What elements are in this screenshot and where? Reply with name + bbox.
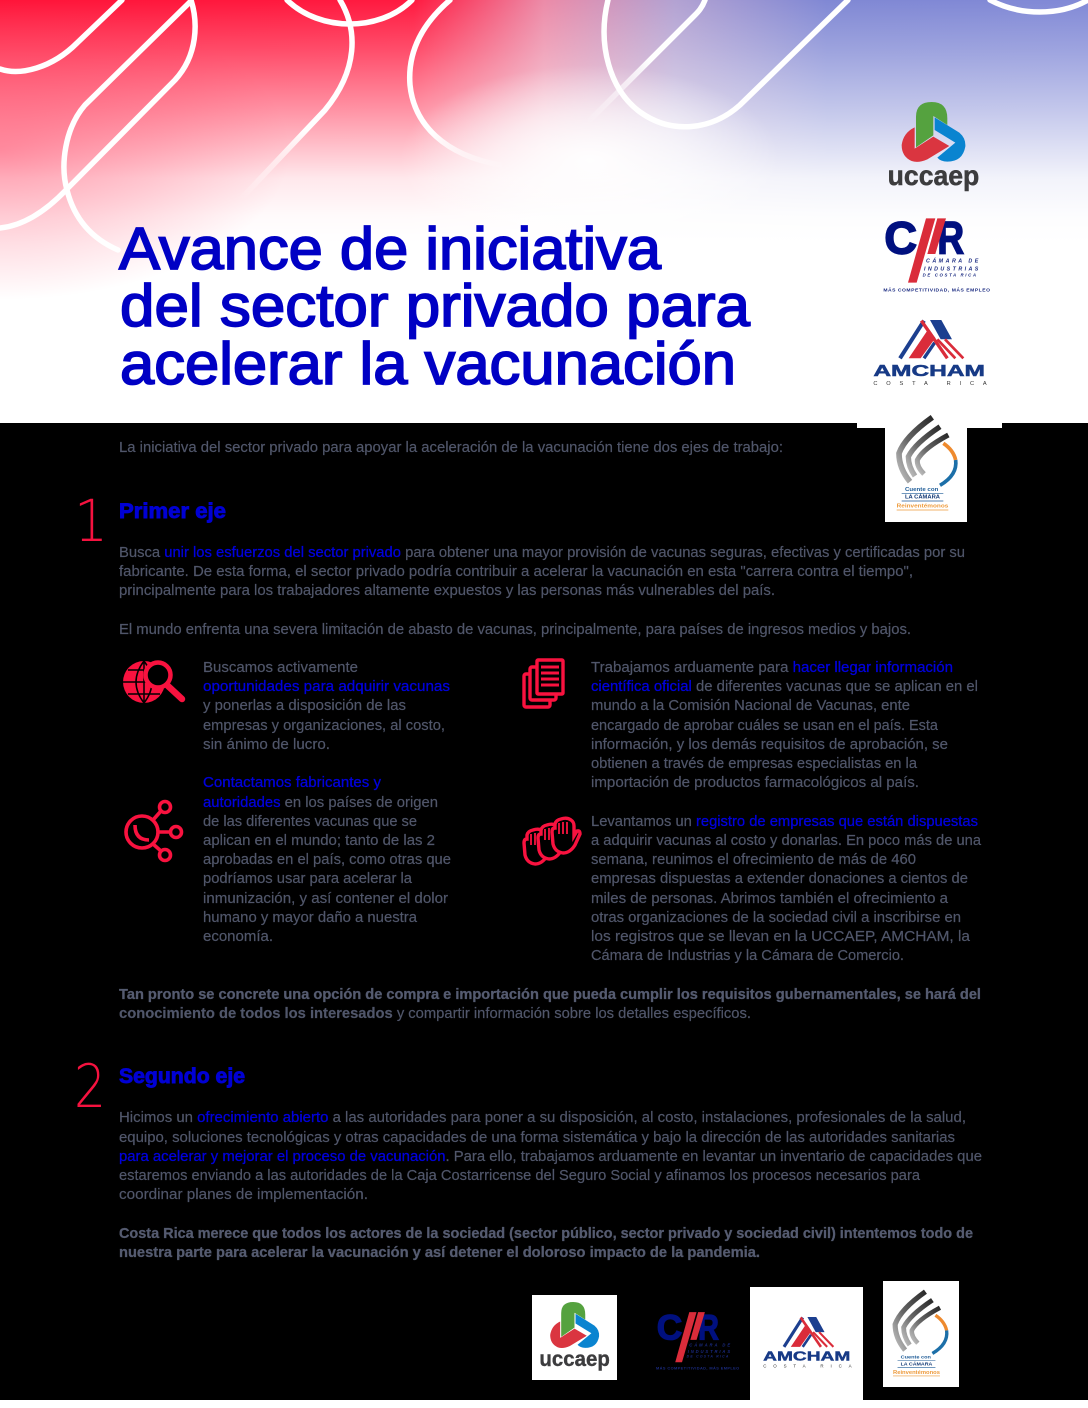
text block: información científica: obtienen a través de empresas especialistas en la bbox=[591, 756, 918, 772]
text block: registro de empresas: Cámara de Industrias y la Cámara de Comercio. bbox=[591, 948, 904, 964]
logo: uccaep top bbox=[888, 102, 979, 191]
text block: registro de empresas: semana, reunimos el ofrecimiento de más de 460 bbox=[591, 852, 916, 868]
footer logo: AMCHAM: COSTA RICA bbox=[763, 1364, 852, 1369]
text block: información científica: importación de productos farmacológicos al país. bbox=[591, 775, 919, 791]
number 2: 2 bbox=[74, 1052, 106, 1122]
text block: registro de empresas: Levantamos un registro de empresas que están dispuestas bbox=[591, 814, 978, 830]
closing statement: nuestra parte para acelerar la vacunación y así detener el doloroso impacto de la pandemia. bbox=[119, 1245, 760, 1261]
logo: Cámara de Industrias top: R bbox=[937, 212, 964, 263]
paragraph: first axis description: fabricante. De esta forma, el sector privado podría contribuir a acelerar la vacunación en esta "carrera contra el tiempo", bbox=[119, 564, 913, 580]
header gradient banner with capsule outlines bbox=[0, 0, 1088, 300]
intro text: La iniciativa del sector privado para apoyar la aceleración de la vacunación tiene dos ejes de trabajo: bbox=[119, 440, 783, 456]
footer logo: Cámara de Industrias: MÁS COMPETITIVIDAD, MÁS EMPLEO bbox=[656, 1365, 739, 1370]
title: del sector privado para bbox=[120, 273, 750, 339]
text block: contactamos fabricantes: Contactamos fabricantes y bbox=[203, 775, 382, 791]
text block: adquirir vacunas bbox=[203, 660, 450, 753]
text block: registro de empresas: otras organizaciones de la sociedad civil a inscribirse en bbox=[591, 910, 961, 926]
text block: información científica: mundo a la Comisión Nacional de Vacunas, ente bbox=[591, 698, 910, 714]
footer logo: Cámara de Industrias: C bbox=[657, 1308, 682, 1347]
title bbox=[119, 216, 750, 397]
paragraph: second axis description: Hicimos un ofrecimiento abierto a las autoridades para poner a su disposición, al costo, instalaciones, profesionales de la salud, bbox=[119, 1110, 966, 1126]
white notch behind top-right logo bbox=[857, 423, 1002, 522]
footer logo: Cámara de Industrias bbox=[656, 1308, 739, 1370]
text block: registro de empresas: los registros que se llevan en la UCCAEP, AMCHAM, la bbox=[591, 929, 971, 945]
heading: segundo eje: Segundo eje bbox=[119, 1065, 245, 1088]
footer logo: uccaep: uccaep bbox=[539, 1347, 610, 1371]
text block: información científica: Trabajamos arduamente para hacer llegar información bbox=[591, 660, 953, 676]
number 1: 1 bbox=[74, 487, 108, 555]
footer logo: AMCHAM: AMCHAM bbox=[763, 1350, 850, 1364]
text block: información científica: información, y los demás requisitos de aprobación, se bbox=[591, 737, 948, 753]
logo: La Cámara top: Reinventémonos bbox=[897, 504, 948, 510]
closing statement bbox=[119, 1226, 973, 1261]
text block: contactamos fabricantes: humano y mayor daño a nuestra bbox=[203, 910, 418, 926]
text block: contactamos fabricantes: aprobadas en el país, como otras que bbox=[203, 852, 451, 868]
text block: contactamos fabricantes bbox=[203, 775, 451, 945]
text block: registro de empresas: a adquirir vacunas al costo y donarlas. En poco más de una bbox=[591, 833, 982, 849]
text block: adquirir vacunas: empresas y organizaciones, al costo, bbox=[203, 718, 445, 734]
footer logo: uccaep bbox=[532, 1295, 617, 1380]
text block: adquirir vacunas: sin ánimo de lucro. bbox=[203, 737, 330, 753]
closing note of first axis: conocimiento de todos los interesados y compartir información sobre los detalles específicos. bbox=[119, 1006, 751, 1022]
footer logo: Cámara de Industrias: CÁMARA DE bbox=[689, 1343, 730, 1348]
footer logo: La Cámara: LA CÁMARA bbox=[901, 1361, 933, 1368]
text block: adquirir vacunas: Buscamos activamente bbox=[203, 660, 358, 676]
footer logo: Cámara de Industrias: R bbox=[698, 1308, 719, 1347]
text block: información científica: encargado de aprobar cuáles se usan en el país. Esta bbox=[591, 718, 939, 734]
text block: contactamos fabricantes: de las diferentes vacunas que se bbox=[203, 814, 417, 830]
text block: contactamos fabricantes: inmunización, y así contener el dolor bbox=[203, 891, 448, 907]
paragraph: second axis description: equipo, soluciones tecnológicas y otras capacidades de una forma sistemática y bajo la dirección de las autoridades sanitarias bbox=[119, 1130, 955, 1146]
icon: globe with magnifier bbox=[123, 661, 182, 703]
title: Avance de iniciativa bbox=[119, 216, 661, 282]
paragraph: first axis description: principalmente para los trabajadores altamente expuestos y las personas más vulnerables del país. bbox=[119, 583, 775, 599]
icon: stacked documents bbox=[524, 660, 563, 707]
logo: Cámara de Industrias top: CÁMARA DE bbox=[926, 258, 979, 265]
text block: registro de empresas: miles de personas. Abrimos también el ofrecimiento a bbox=[591, 891, 949, 907]
text block: registro de empresas bbox=[591, 814, 982, 964]
logo: Cámara de Industrias top: DE COSTA RICA bbox=[923, 273, 976, 278]
footer logo: Cámara de Industrias: INDUSTRIAS bbox=[688, 1349, 730, 1354]
icon: raised hands bbox=[524, 818, 580, 864]
closing statement: Costa Rica merece que todos los actores de la sociedad (sector público, sector privado y sociedad civil) intentemos todo de bbox=[119, 1226, 973, 1242]
text block: contactamos fabricantes: podríamos usar para acelerar la bbox=[203, 871, 413, 887]
paragraph: second axis description bbox=[119, 1110, 982, 1203]
text block: contactamos fabricantes: economía. bbox=[203, 929, 273, 945]
footer logo: La Cámara bbox=[883, 1281, 959, 1387]
text block: adquirir vacunas: y ponerlas a disposición de las bbox=[203, 698, 406, 714]
logo: Cámara de Industrias top: C bbox=[884, 212, 917, 263]
section 1: primer eje bbox=[74, 487, 982, 1022]
logo: AMCHAM top bbox=[873, 320, 987, 387]
paragraph: second axis description: estaremos enviando a las autoridades de la Caja Costarricense del Seguro Social y afinamos los procesos necesarios para bbox=[119, 1168, 921, 1184]
paragraph: first axis description: El mundo enfrenta una severa limitación de abasto de vacunas, principalmente, para países de ingresos medios y bajos. bbox=[119, 622, 911, 638]
footer logo: Cámara de Industrias: DE COSTA RICA bbox=[687, 1355, 729, 1359]
paragraph: first axis description: Busca unir los esfuerzos del sector privado para obtener una mayor provisión de vacunas seguras, efectivas y certificadas por su bbox=[119, 545, 965, 561]
logo: AMCHAM top: AMCHAM bbox=[873, 363, 985, 380]
heading: primer eje: Primer eje bbox=[119, 500, 226, 523]
icon: phone network bbox=[126, 802, 182, 860]
logo: La Cámara top bbox=[897, 417, 956, 510]
title: acelerar la vacunación bbox=[120, 331, 736, 397]
footer logos bbox=[532, 1281, 959, 1400]
footer logo: La Cámara: Reinventémonos bbox=[893, 1370, 940, 1376]
text block: adquirir vacunas: oportunidades para adquirir vacunas bbox=[203, 679, 450, 695]
logo: Cámara de Industrias top bbox=[883, 212, 990, 294]
paragraph: first axis description bbox=[119, 545, 965, 638]
text block: contactamos fabricantes: autoridades en los países de origen bbox=[203, 795, 438, 811]
logo: uccaep top: uccaep bbox=[888, 160, 979, 191]
section 2: segundo eje bbox=[74, 1052, 982, 1261]
text block: información científica bbox=[591, 660, 978, 791]
logo: Cámara de Industrias top: INDUSTRIAS bbox=[924, 267, 979, 273]
logo: Cámara de Industrias top: MÁS COMPETITIVIDAD, MÁS EMPLEO bbox=[883, 287, 990, 294]
footer logo: AMCHAM bbox=[750, 1287, 863, 1400]
text block: contactamos fabricantes: aplican en el mundo; tanto de las 2 bbox=[203, 833, 435, 849]
text block: información científica: científica oficial de diferentes vacunas que se aplican en el bbox=[591, 679, 978, 695]
closing note of first axis bbox=[119, 987, 981, 1022]
paragraph: second axis description: coordinar planes de implementación. bbox=[119, 1187, 368, 1203]
footer logo: La Cámara: Cuente con bbox=[901, 1355, 931, 1361]
logo: La Cámara top: Cuente con bbox=[905, 487, 938, 493]
logo: La Cámara top: LA CÁMARA bbox=[905, 494, 940, 501]
closing note of first axis: Tan pronto se concrete una opción de compra e importación que pueda cumplir los requisitos gubernamentales, se hará del bbox=[119, 987, 981, 1003]
logo: AMCHAM top: COSTA RICA bbox=[873, 381, 987, 387]
paragraph: second axis description: para acelerar y mejorar el proceso de vacunación . Para ello, trabajamos arduamente en levantar un inventario de capacidades que bbox=[119, 1149, 982, 1165]
page background: black panel bbox=[0, 423, 1088, 1400]
text block: registro de empresas: empresas dispuestas a extender donaciones a cientos de bbox=[591, 871, 968, 887]
